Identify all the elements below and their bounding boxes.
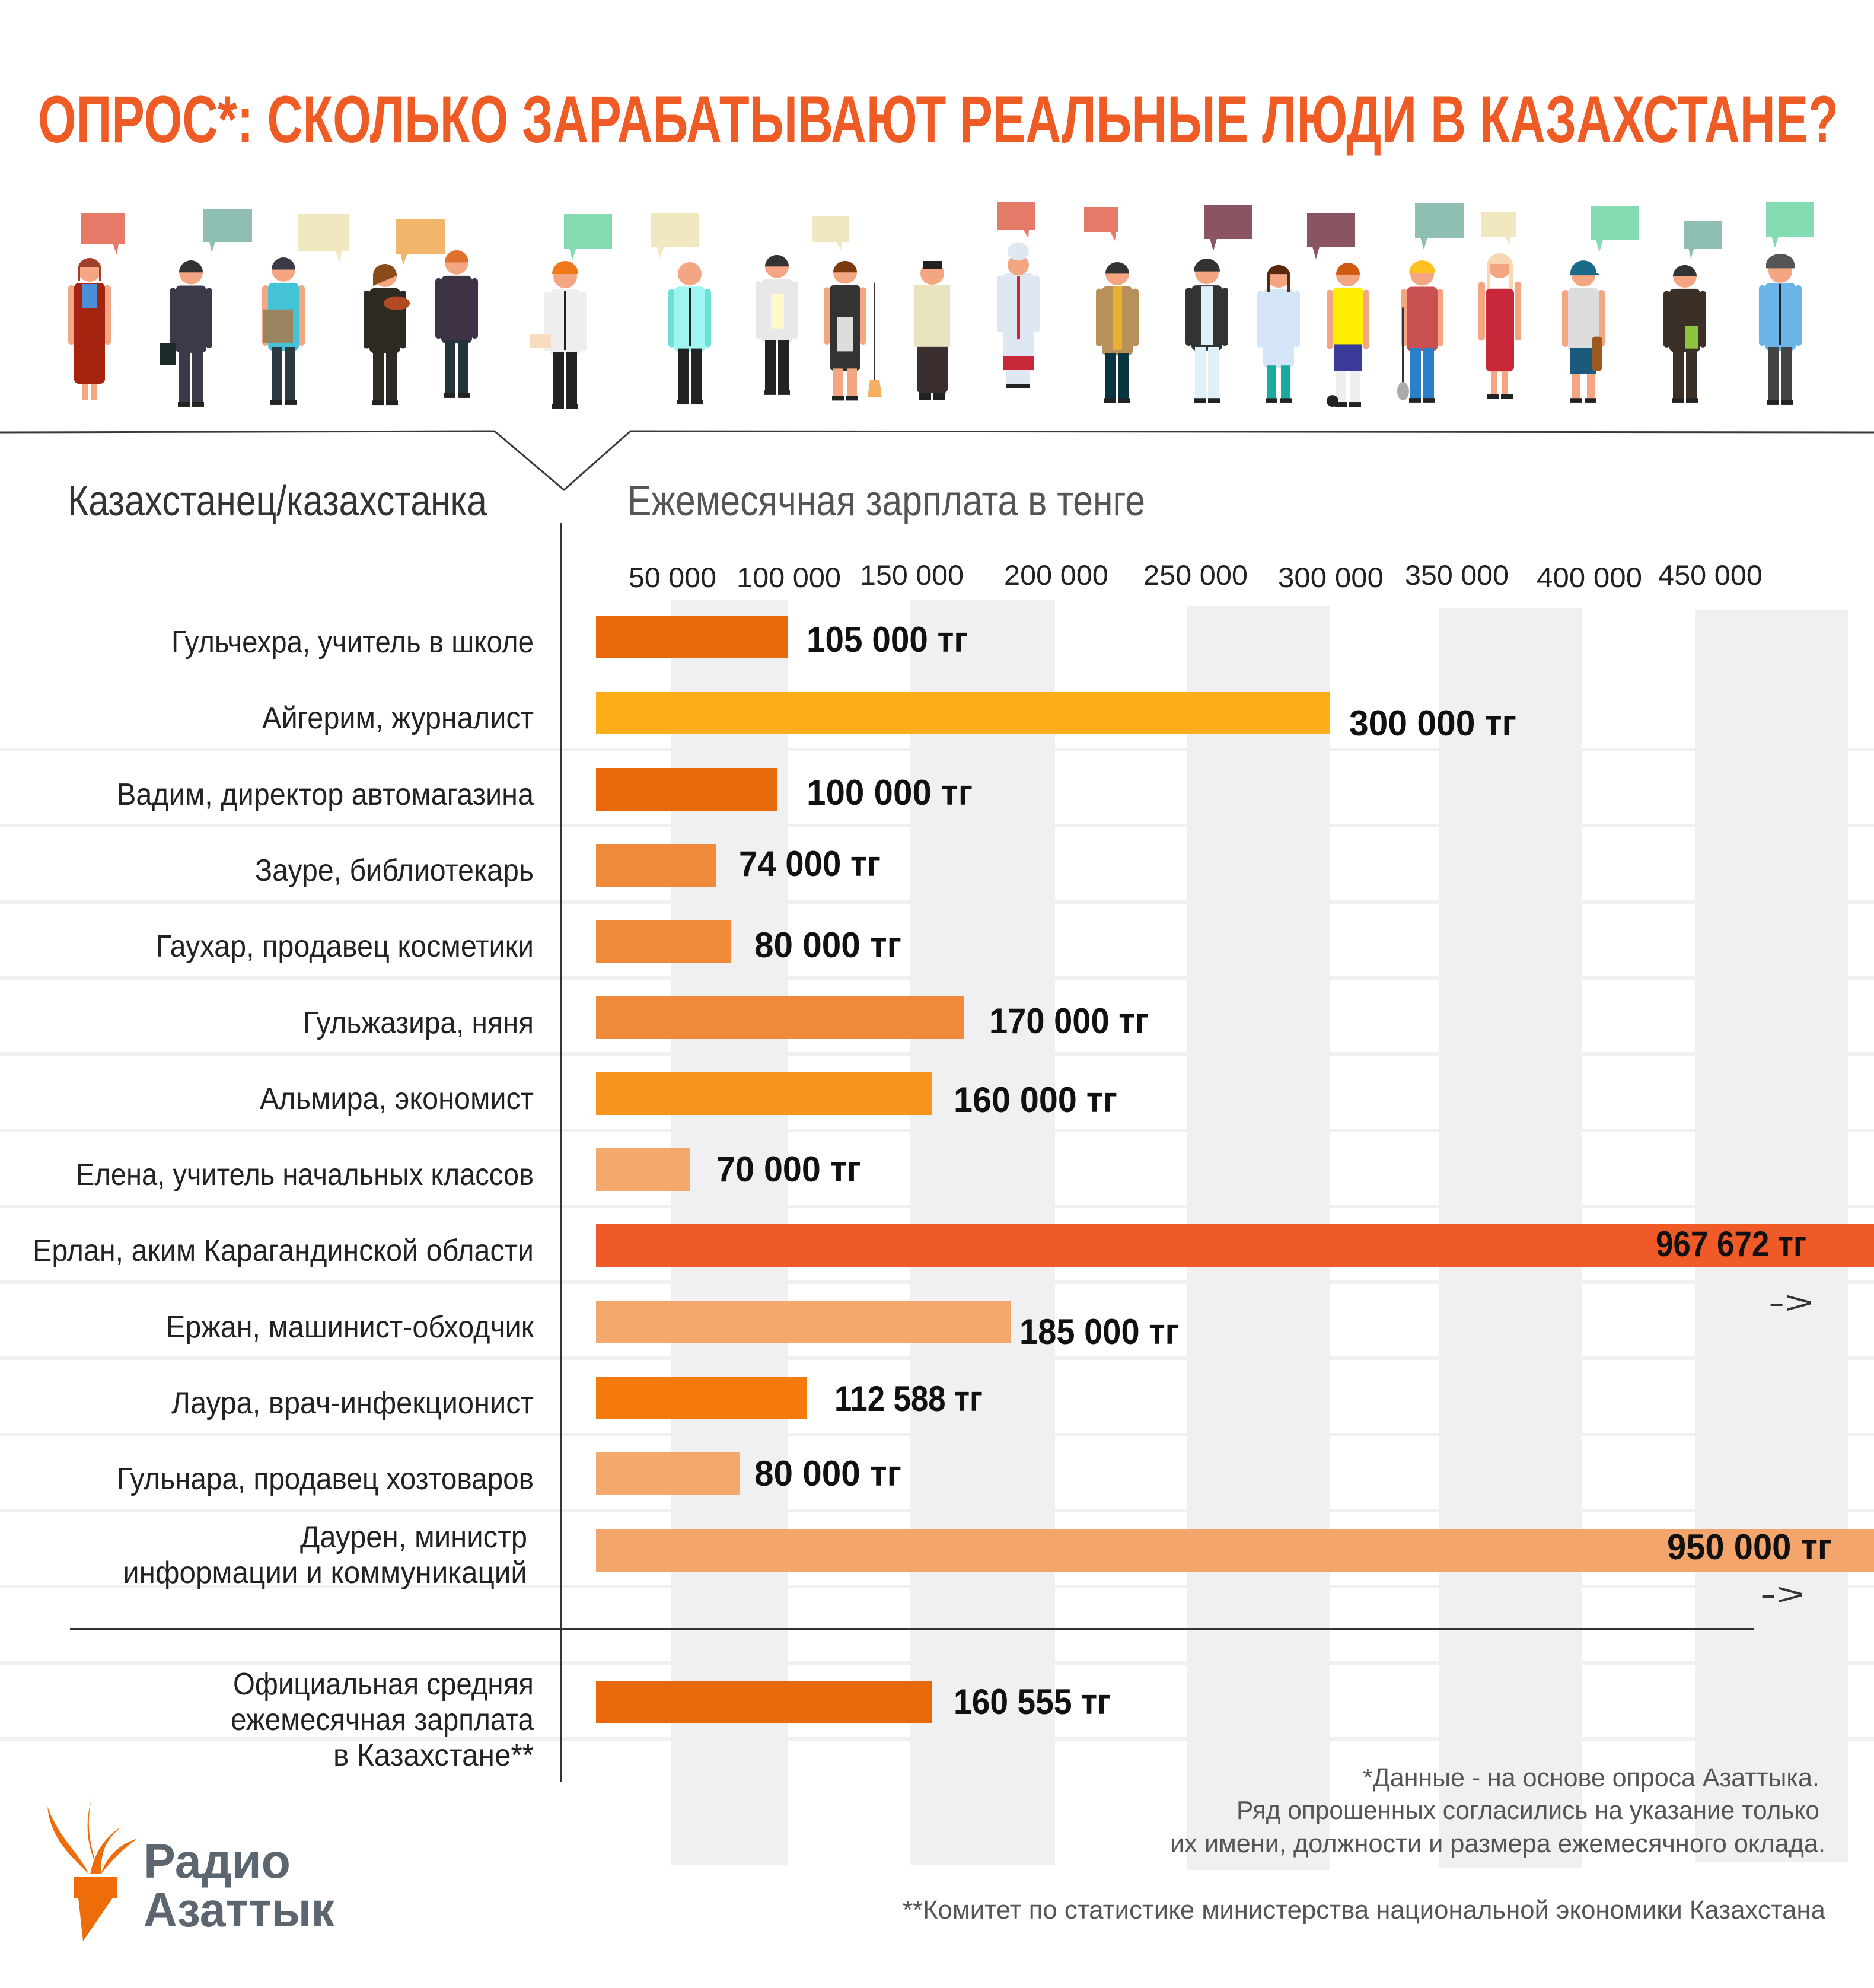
row labels: Айгерим, журналист bbox=[262, 701, 534, 735]
value labels bbox=[716, 620, 1832, 1567]
value labels: 105 000 тг bbox=[807, 620, 968, 660]
row grid lines bbox=[0, 748, 1874, 1741]
axis tick labels: 400 000 bbox=[1537, 562, 1642, 593]
official average salary row: ежемесячная зарплата bbox=[231, 1703, 534, 1737]
row labels: Гульчехра, учитель в школе bbox=[171, 625, 534, 660]
row labels: Зауре, библиотекарь bbox=[255, 853, 534, 888]
value labels: 80 000 тг bbox=[754, 1454, 901, 1493]
left header: Казахстанец/казахстанка bbox=[68, 477, 487, 525]
value labels: 185 000 тг bbox=[1019, 1312, 1179, 1352]
illustration: people with speech bubbles bbox=[68, 202, 1814, 409]
value labels: 967 672 тг bbox=[1656, 1224, 1806, 1264]
logo: Radio Azattyk bbox=[47, 1798, 335, 1941]
footnotes: *Данные - на основе опроса Азаттыка. bbox=[1363, 1763, 1819, 1792]
axis tick labels: 300 000 bbox=[1278, 562, 1384, 593]
row labels: Гульнара, продавец хозтоваров bbox=[117, 1462, 534, 1496]
value labels: 300 000 тг bbox=[1349, 703, 1516, 743]
value labels: 950 000 тг bbox=[1667, 1527, 1832, 1567]
row labels: Гульжазира, няня bbox=[303, 1006, 534, 1040]
axis tick labels: 450 000 bbox=[1658, 559, 1763, 591]
people figures bbox=[68, 242, 1802, 409]
official average salary row: 160 555 тг bbox=[954, 1682, 1111, 1722]
row labels: Ерлан, аким Карагандинской области bbox=[33, 1234, 534, 1268]
axis tick labels: 100 000 bbox=[737, 562, 841, 593]
icon: torch bbox=[47, 1798, 138, 1941]
logo: Radio Azattyk: Радио bbox=[144, 1834, 291, 1888]
bar chart: salaries bbox=[596, 616, 1874, 1572]
row labels: Вадим, директор автомагазина bbox=[117, 778, 534, 812]
speech bubbles bbox=[81, 202, 1814, 265]
official average salary row bbox=[231, 1667, 1111, 1773]
grey scale columns bbox=[671, 600, 1848, 1870]
row labels: Гаухар, продавец косметики bbox=[156, 929, 534, 964]
value labels: 112 588 тг bbox=[834, 1379, 983, 1419]
value labels: 70 000 тг bbox=[716, 1149, 861, 1189]
axis tick labels: 150 000 bbox=[860, 559, 964, 591]
row labels: Альмира, экономист bbox=[260, 1082, 534, 1116]
official average salary row: Официальная средняя bbox=[233, 1667, 534, 1702]
row labels: Даурен, министр bbox=[300, 1520, 527, 1554]
value labels: 74 000 тг bbox=[739, 844, 881, 884]
axis tick labels: 250 000 bbox=[1143, 559, 1248, 591]
logo: Radio Azattyk: Азаттык bbox=[144, 1883, 335, 1937]
value labels: 100 000 тг bbox=[807, 773, 973, 813]
row labels: Лаура, врач-инфекционист bbox=[171, 1386, 534, 1420]
arrow: off-scale 2: -> bbox=[1760, 1578, 1805, 1612]
value labels: 170 000 тг bbox=[989, 1001, 1149, 1041]
row labels bbox=[33, 625, 534, 1590]
axis tick labels: 50 000 bbox=[629, 562, 716, 593]
divider with notch bbox=[0, 431, 1874, 490]
value labels: 160 000 тг bbox=[954, 1080, 1117, 1120]
axis tick labels bbox=[629, 559, 1763, 593]
value labels: 80 000 тг bbox=[754, 925, 901, 965]
row labels: Ержан, машинист-обходчик bbox=[166, 1310, 534, 1345]
footnotes: Ряд опрошенных согласились на указание только bbox=[1236, 1796, 1819, 1825]
footnotes: **Комитет по статистике министерства национальной экономики Казахстана bbox=[903, 1895, 1826, 1925]
axis tick labels: 350 000 bbox=[1405, 559, 1509, 591]
vertical axis line bbox=[560, 523, 562, 1782]
footnotes: их имени, должности и размера ежемесячного оклада. bbox=[1170, 1829, 1825, 1858]
arrow: off-scale 1: -> bbox=[1768, 1286, 1813, 1320]
row labels: Елена, учитель начальных классов bbox=[76, 1158, 534, 1192]
right header: Ежемесячная зарплата в тенге bbox=[627, 477, 1145, 525]
axis tick labels: 200 000 bbox=[1004, 559, 1108, 591]
separator line bbox=[70, 1628, 1754, 1630]
row labels: информации и коммуникаций bbox=[123, 1556, 527, 1590]
official average salary row: в Казахстане** bbox=[333, 1738, 534, 1773]
footnotes bbox=[903, 1763, 1826, 1925]
